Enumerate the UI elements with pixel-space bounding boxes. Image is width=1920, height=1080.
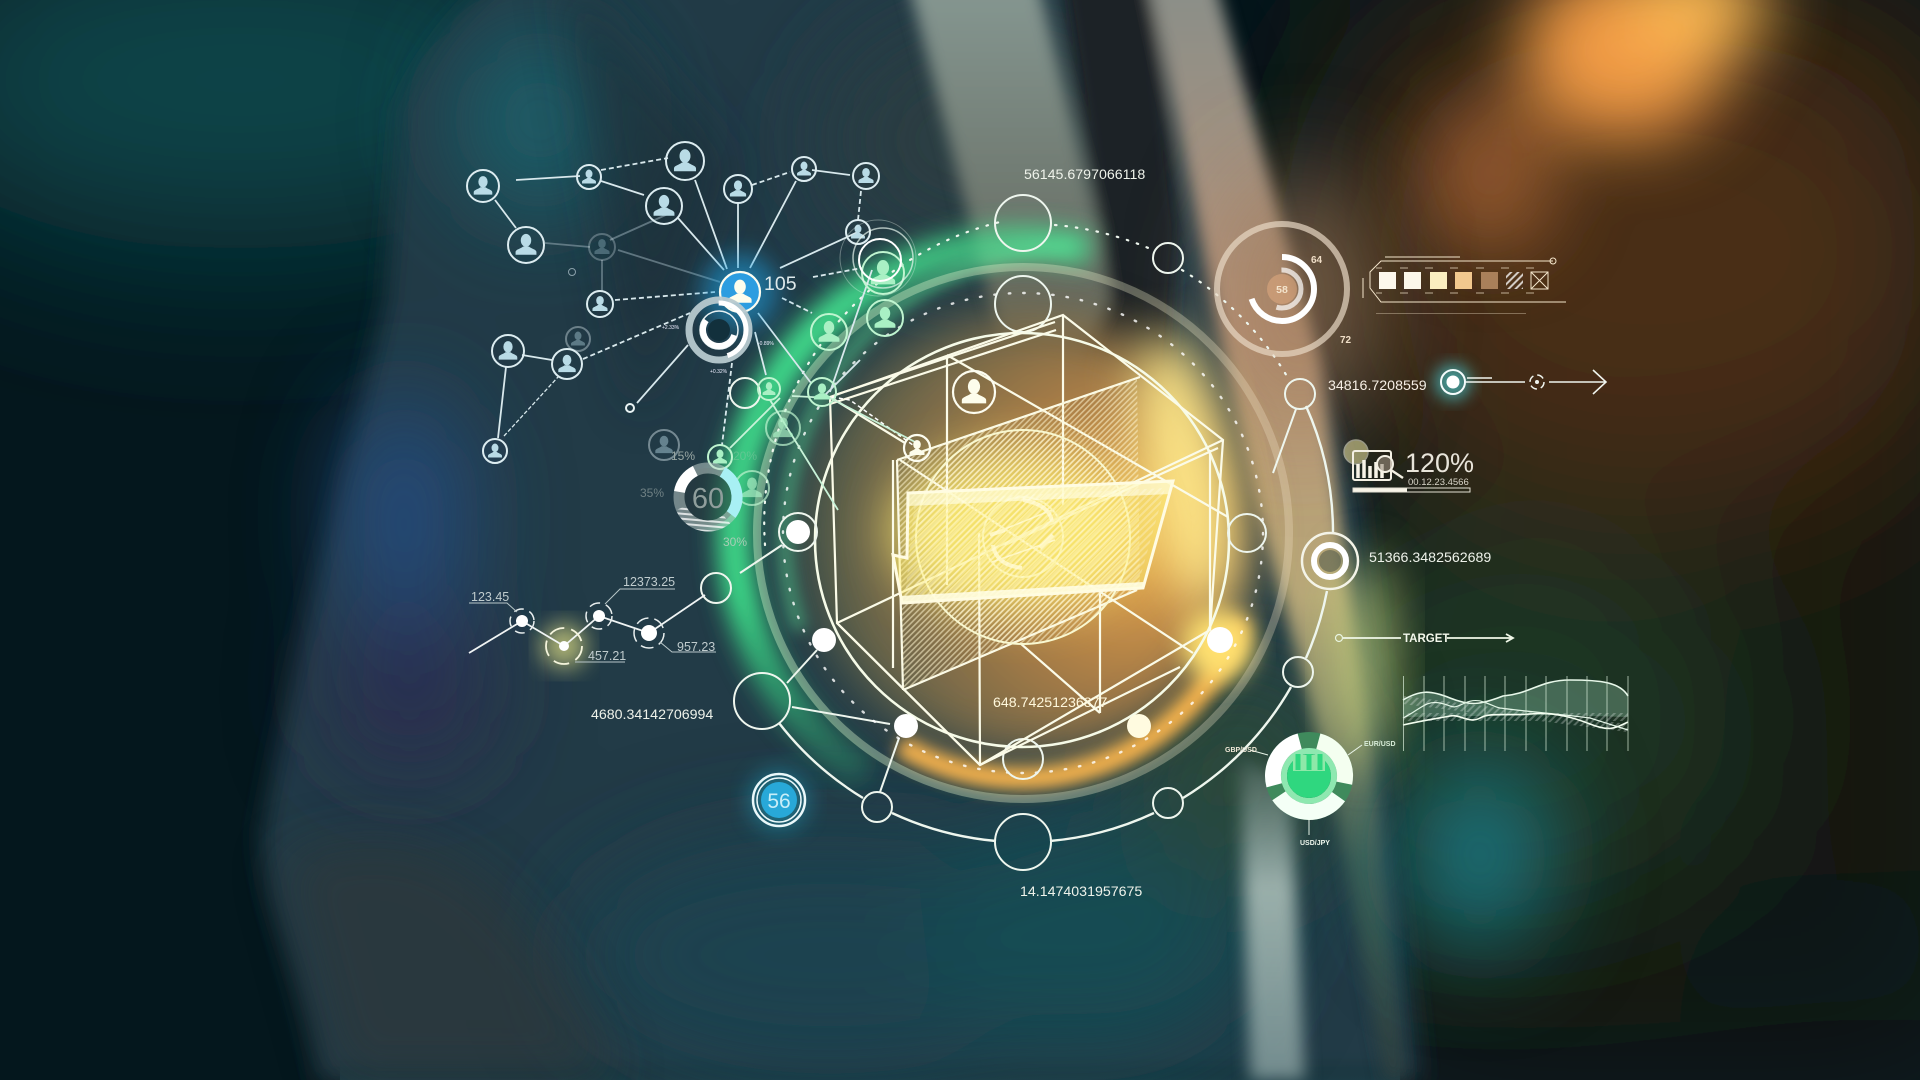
open folder: [893, 481, 1173, 603]
people network: [467, 142, 995, 510]
hub node with count: 105: [764, 273, 797, 295]
outer orbit ring with nodes: [701, 195, 1333, 870]
value with glowing arrow: 34816.7208559: [1328, 378, 1427, 394]
donut chart 60: 20%: [733, 449, 757, 463]
stat 120% with chart icon: 120%: [1405, 448, 1474, 478]
line chart with values: 12373.25: [623, 575, 675, 589]
target arrow: [1336, 633, 1513, 645]
target arrow: TARGET: [1403, 633, 1449, 645]
donut chart 60: 15%: [671, 449, 695, 463]
concentric gauge: 64: [1311, 255, 1323, 266]
inner dotted ring: [779, 276, 1266, 779]
stat 120% with chart icon: 00.12.23.4566: [1408, 477, 1469, 488]
donut gauge near hub: -0.89%: [758, 341, 774, 347]
value: 51366: 51366.3482562689: [1369, 550, 1491, 566]
donut gauge near hub: +2.33%: [662, 325, 680, 331]
sleeve shading: [280, 0, 730, 1080]
currency donut: USD/JPY: [1300, 840, 1330, 847]
stat 120% with chart icon: [1344, 440, 1474, 492]
donut chart 60: 60: [692, 483, 724, 515]
jacket silhouette: [262, 0, 1420, 1080]
translucent thick ring: [757, 267, 1289, 799]
badge 56: 56: [767, 790, 791, 813]
value with glowing arrow: [1328, 364, 1606, 400]
concentric gauge: 58: [1276, 284, 1288, 296]
wireframe cube: [830, 315, 1228, 765]
line chart with values: 457.21: [588, 649, 626, 663]
shirt and tie: [905, 0, 1405, 1080]
donut chart 60: 35%: [640, 486, 664, 500]
line chart with values: 957.23: [677, 640, 715, 654]
badge 56: [749, 770, 809, 830]
currency donut: [1225, 726, 1396, 847]
value: 648.74: 648.74251236877: [993, 695, 1108, 711]
concentric gauge: [1217, 224, 1352, 354]
currency donut: GBP/USD: [1225, 747, 1257, 754]
swatch panel: [1363, 257, 1566, 314]
line chart with values: [469, 575, 716, 668]
hub node with count: [702, 254, 797, 330]
lens flares: [1420, 0, 1770, 255]
value: 56145: 56145.6797066118: [1024, 167, 1145, 183]
currency donut: EUR/USD: [1364, 741, 1396, 748]
area line chart: [1403, 676, 1628, 751]
donut gauge near hub: +0.32%: [710, 369, 728, 375]
value: 14.147: 14.1474031957675: [1020, 884, 1142, 900]
line chart with values: 123.45: [471, 590, 509, 604]
donut chart 60: [640, 449, 757, 549]
hatched circle with refresh arrows: [916, 430, 1130, 644]
donut chart 60: 30%: [723, 535, 747, 549]
donut gauge near hub: [662, 300, 774, 375]
green and orange glow ring: [734, 242, 1254, 778]
value: 4680: 4680.34142706994: [591, 707, 713, 723]
concentric gauge: 72: [1340, 335, 1352, 346]
concentric node: [1302, 533, 1358, 589]
